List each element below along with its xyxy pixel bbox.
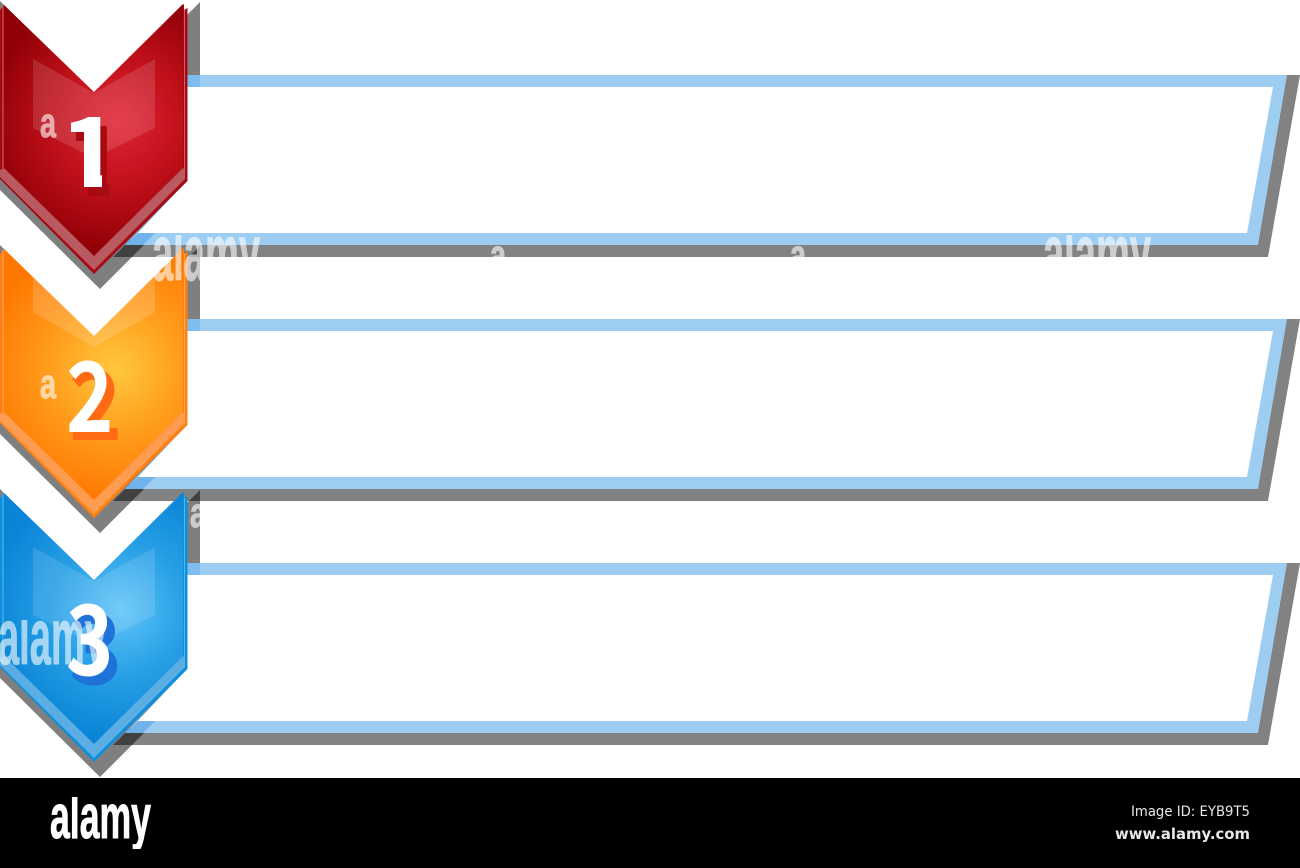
footer bar: [0, 778, 1300, 868]
gloss: [33, 273, 155, 347]
website: www.alamy.com: [1115, 825, 1250, 843]
panel shadows: [113, 75, 1300, 745]
chevron 2: [0, 248, 188, 518]
chevron shadows: [0, 1, 200, 777]
watermarks: alamy: [0, 592, 106, 681]
gloss: [33, 59, 155, 158]
number 2: 2: [69, 327, 122, 468]
chevron 1: [0, 4, 188, 274]
watermarks: a: [40, 360, 56, 407]
panel 2: [125, 319, 1287, 489]
image id: Image ID: EYB9T5: [1131, 804, 1250, 820]
panel 3: [125, 563, 1287, 733]
number 1: [71, 117, 109, 196]
gloss: [33, 547, 155, 645]
watermarks: a: [790, 231, 806, 278]
watermarks: alamy: [152, 208, 260, 297]
watermarks: a: [190, 489, 206, 536]
watermarks: [0, 99, 1151, 681]
number 1: 1: [57, 76, 123, 216]
number 1: 1: [56, 84, 133, 225]
footer logo: alamy: [50, 783, 151, 852]
number 3: 3: [66, 563, 114, 703]
chevron 3: [0, 492, 188, 762]
number 3: 3: [69, 571, 122, 712]
watermarks: a: [40, 99, 56, 146]
infographic: alamy: [1043, 208, 1151, 297]
panel 1: [125, 75, 1287, 245]
number 2: 2: [66, 320, 114, 460]
watermarks: a: [490, 231, 506, 278]
